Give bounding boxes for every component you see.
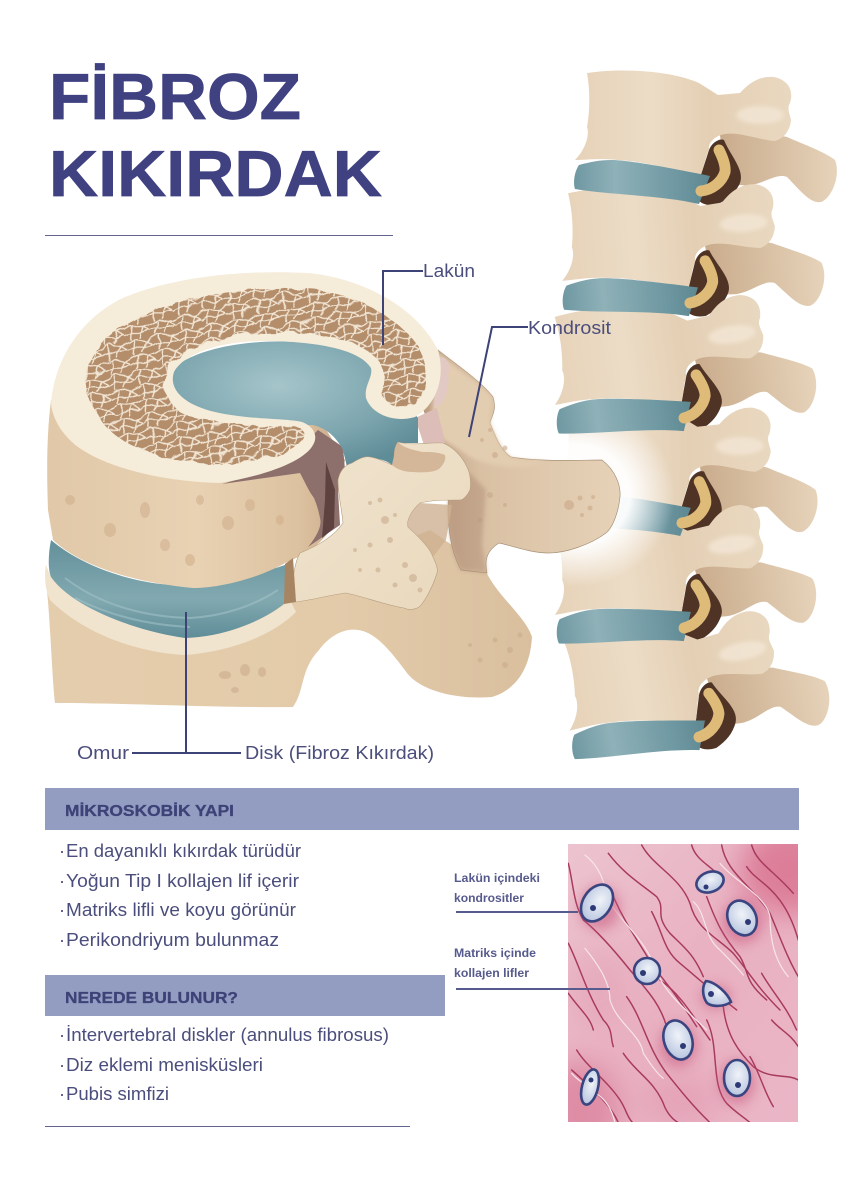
list: microscopic properties: · (59, 900, 65, 920)
title (49, 60, 382, 210)
cell nuclei (588, 884, 751, 1088)
upper vertebra pores (65, 495, 284, 566)
leader: Omur and Disk (77, 612, 434, 763)
list: microscopic properties: Matriks lifli ve koyu görünür (66, 900, 296, 920)
leader: Kondrosit: Kondrosit (528, 318, 611, 338)
list: microscopic properties: · (59, 930, 65, 950)
disc band highlights (65, 578, 278, 627)
cell halos (580, 886, 762, 1104)
micrograph label: lacuna chondrocytes: Lakün içindeki (454, 871, 540, 885)
fading disc 4 (555, 492, 691, 538)
process pores (478, 428, 595, 522)
list: locations: Pubis simfizi (66, 1084, 169, 1104)
intervertebral discs (554, 160, 710, 774)
darker pink corners (568, 844, 798, 1122)
leader: Omur and Disk: Omur (77, 743, 129, 763)
list: microscopic properties: Yoğun Tip I kollajen lif içerir (66, 871, 299, 891)
leader: Kondrosit (469, 318, 611, 437)
white fade over spine (475, 403, 675, 587)
pedicle light top surface (432, 352, 545, 467)
list: locations: · (59, 1025, 65, 1045)
list: microscopic properties: Perikondriyum bulunmaz (66, 930, 279, 950)
panel: Mikroskobik Yapı: MİKROSKOBİK YAPI (65, 802, 234, 820)
lower vertebra pores (219, 632, 522, 693)
micrograph label: collagen fibers (454, 946, 610, 990)
list: microscopic properties (59, 841, 301, 950)
articular shade (408, 503, 452, 557)
micrograph label: collagen fibers: kollajen lifler (454, 966, 529, 980)
collagen fibers (568, 845, 798, 1123)
list: locations (59, 1025, 389, 1104)
spongy lattice (86, 289, 425, 463)
micrograph label: collagen fibers: Matriks içinde (454, 946, 536, 960)
vertebra bodies and processes (542, 70, 837, 775)
lower vertebra body and process (46, 530, 532, 707)
leader: Lakün: Lakün (423, 261, 475, 281)
micrograph panel (568, 844, 798, 1122)
pink ligament strands (415, 408, 445, 445)
articular process (292, 442, 471, 609)
pedicle and transverse process (420, 350, 620, 573)
cream rim of cut surface (51, 272, 441, 483)
dark notch tissue (222, 430, 345, 547)
list: microscopic properties: · (59, 841, 65, 861)
list: locations: · (59, 1084, 65, 1104)
micrograph label: lacuna chondrocytes: kondrositler (454, 891, 524, 905)
chondrocyte cells (574, 868, 762, 1106)
list: microscopic properties: En dayanıklı kıkırdak türüdür (66, 841, 301, 861)
list: locations: İntervertebral diskler (annulus fibrosus) (66, 1025, 389, 1045)
panel: Mikroskobik Yapı (45, 788, 799, 830)
title: FİBROZ (49, 60, 301, 133)
articular hole (392, 442, 445, 472)
notch dark streaks (322, 462, 335, 538)
spine side view illustration (475, 70, 837, 775)
main vertebra illustration (45, 272, 620, 707)
pink ligament bumps (434, 357, 449, 408)
list: locations: · (59, 1055, 65, 1075)
leader: Omur and Disk: Disk (Fibroz Kıkırdak) (245, 743, 434, 763)
leader: Lakün (383, 261, 475, 345)
shaded pedicle base (448, 473, 487, 573)
micrograph label: lacuna chondrocytes (454, 871, 578, 913)
disc band (49, 540, 285, 638)
upper vertebra body (47, 400, 345, 588)
yellow nerve roots (678, 150, 725, 737)
list: locations: Diz eklemi menisküsleri (66, 1055, 263, 1075)
list: microscopic properties: · (59, 871, 65, 891)
white fibers (572, 855, 788, 1123)
panel: Nerede Bulunur (45, 975, 445, 1016)
brown edge by disc (284, 558, 296, 604)
nucleus (165, 341, 418, 467)
title: KIKIRDAK (49, 137, 382, 210)
lower vertebra cream rim (45, 565, 296, 655)
panel: Nerede Bulunur: NEREDE BULUNUR? (65, 990, 238, 1007)
articular pores (353, 498, 422, 592)
